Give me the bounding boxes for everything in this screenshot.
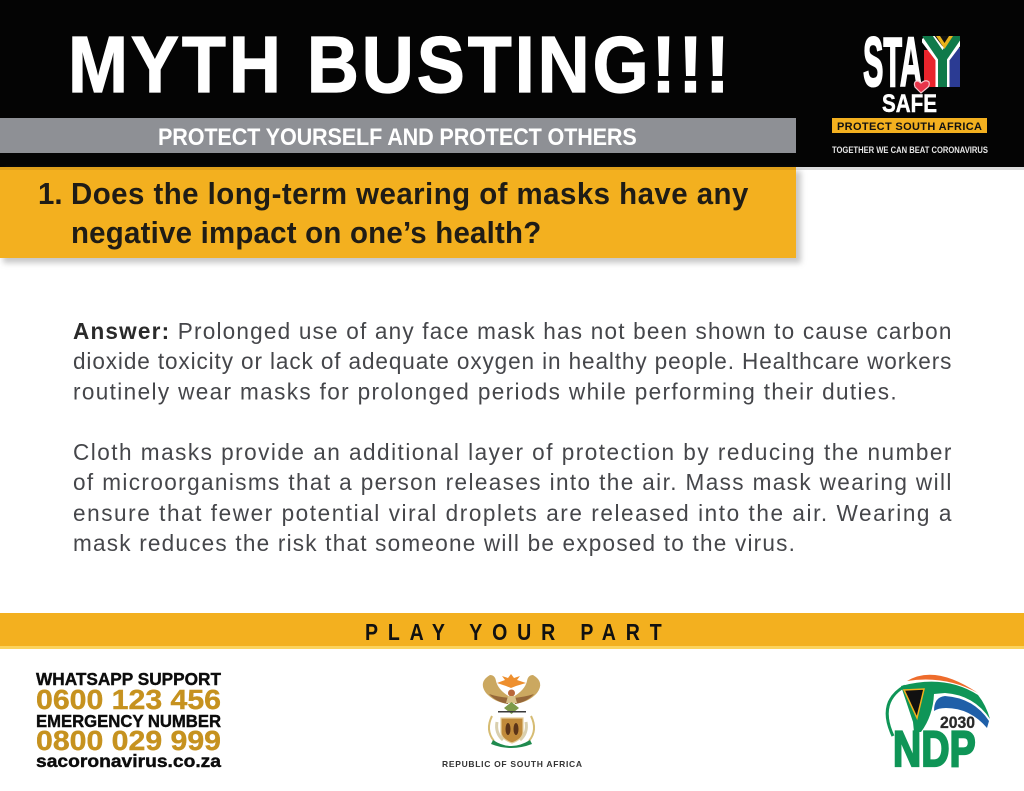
question panel: Does the long-term wearing of masks have any [71,177,749,211]
answer text [73,318,951,405]
subtitle bar [0,118,796,153]
contact details: sacoronavirus.co.za [36,751,221,771]
answer text: dioxide toxicity or lack of adequate oxygen in healthy people. Healthcare workers [73,348,951,374]
coat of arms emblem: REPUBLIC OF SOUTH AFRICA [442,759,582,769]
question panel [0,167,801,263]
icon: blue arc [934,696,989,728]
cloth masks text [73,439,952,556]
NDP 2030 logo: NDP [893,720,976,777]
cloth masks text: mask reduces the risk that someone will be exposed to the virus. [73,530,795,556]
cloth masks text: Cloth masks provide an additional layer of protection by reducing the number [73,439,952,465]
question panel: negative impact on one’s health? [71,216,541,250]
icon: sun [497,674,526,688]
logo: Stay Safe: STA [863,23,922,101]
logo: Stay Safe [832,36,988,153]
play your part band [0,613,1024,649]
cloth masks text: of microorganisms that a person releases into the air. Mass mask wearing will [73,469,951,495]
answer text: routinely wear masks for prolonged periods while performing their duties. [73,378,897,405]
contact details: EMERGENCY NUMBER [36,711,221,731]
NDP 2030 logo: 2030 [940,713,975,732]
logo: Stay Safe: PROTECT SOUTH AFRICA [837,121,982,133]
NDP 2030 logo [887,675,990,777]
icon: bird head and crest [498,690,526,714]
title: MYTH BUSTING!!! [68,21,730,110]
header band [0,0,1024,170]
icon: black triangle [904,689,924,718]
icon: shield [489,716,534,748]
contact details: WHATSAPP SUPPORT [36,669,221,689]
icon: flag Y [924,34,960,87]
logo: Stay Safe: SAFE [882,90,937,118]
play your part band: PLAY YOUR PART [365,620,662,645]
coat of arms emblem [442,674,582,769]
contact details [36,669,221,771]
logo: Stay Safe: TOGETHER WE CAN BEAT CORONAVIRUS [832,145,988,156]
icon: wings [483,675,540,704]
icon: orange arc [907,675,978,693]
answer text: Answer: Prolonged use of any face mask has not been shown to cause carbon [73,318,951,344]
cloth masks text: ensure that fewer potential viral droplets are released into the air. Wearing a [73,500,952,526]
contact details: 0800 029 999 [36,725,221,756]
icon: heart [914,81,929,93]
question panel: 1. [38,177,63,211]
subtitle bar: PROTECT YOURSELF AND PROTECT OTHERS [158,123,637,150]
icon: green ring and flag [887,682,990,736]
contact details: 0600 123 456 [36,684,221,715]
